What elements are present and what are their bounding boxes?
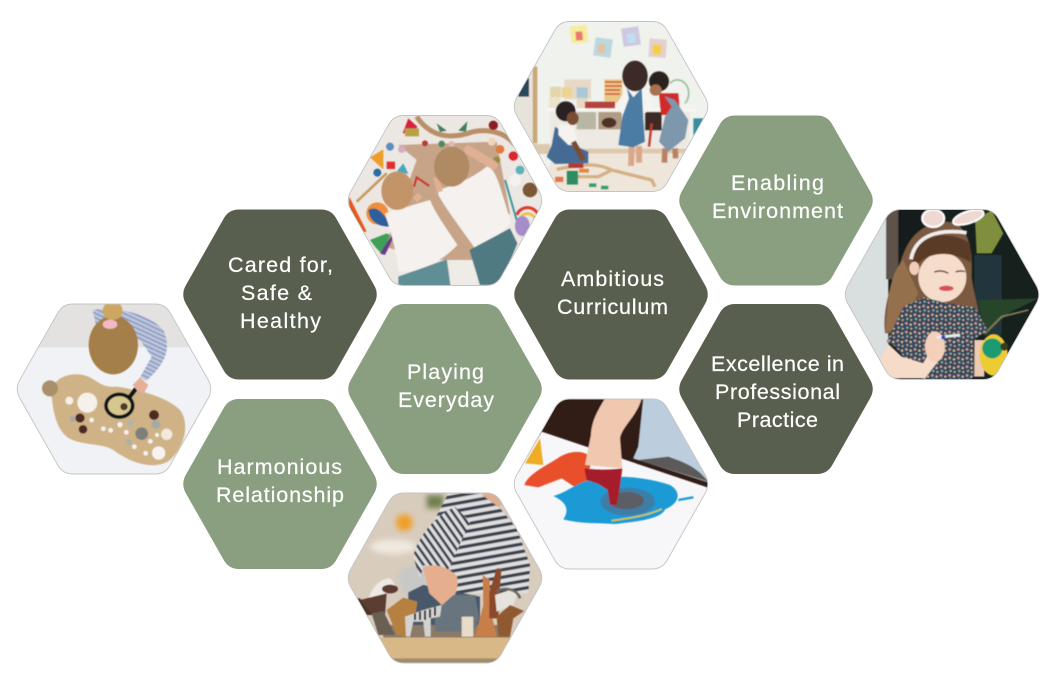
- hexagon: Harmonious Relationship: [183, 399, 377, 569]
- label: Enabling Environment: [712, 171, 843, 223]
- label: Ambitious Curriculum: Curriculum: [557, 295, 668, 319]
- photo border: finger painting: [514, 399, 708, 569]
- label: Playing Everyday: Everyday: [398, 388, 494, 412]
- label: Ambitious Curriculum: [557, 267, 668, 319]
- photo border: egg painting: [845, 210, 1039, 380]
- label: Playing Everyday: [398, 360, 494, 412]
- label: Cared for, Safe & Healthy: Safe &: [241, 281, 312, 305]
- photo hexagon: children playing in classroom: [514, 22, 708, 191]
- hexagon: Excellence in Professional Practice: [679, 304, 873, 474]
- photo border: classroom: [514, 22, 708, 192]
- label: Excellence in Professional Practice: Practice: [737, 408, 818, 432]
- label: Cared for, Safe & Healthy: [228, 253, 333, 333]
- label: Excellence in Professional Practice: Professional: [715, 380, 840, 404]
- label: Excellence in Professional Practice: Excellence in: [711, 352, 844, 376]
- label: Ambitious Curriculum: Ambitious: [561, 267, 664, 291]
- photo hexagon: child playing with toy animals: [348, 494, 542, 662]
- label: Harmonious Relationship: [216, 455, 344, 507]
- label: Cared for, Safe & Healthy: Cared for,: [228, 253, 333, 277]
- photo hexagon: child exploring sand with magnifier: [18, 304, 210, 474]
- photo hexagon: two children drawing on paper: [348, 116, 542, 285]
- label: Excellence in Professional Practice: [711, 352, 844, 432]
- photo hexagon: finger painting: [523, 400, 708, 525]
- hexagon: Ambitious Curriculum: [514, 210, 708, 380]
- hexagon: Playing Everyday: [348, 304, 542, 474]
- label: Enabling Environment: Environment: [712, 199, 843, 223]
- label: Playing Everyday: Playing: [407, 360, 484, 384]
- photo border: sand: [17, 304, 211, 474]
- label: Harmonious Relationship: Harmonious: [217, 455, 342, 479]
- label: Enabling Environment: Enabling: [731, 171, 824, 195]
- hexagon: Enabling Environment: [679, 116, 873, 286]
- photo hexagon: girl with bunny ears painting an egg: [846, 210, 1038, 379]
- photo border: toy animals: [348, 493, 542, 663]
- label: Cared for, Safe & Healthy: Healthy: [240, 309, 321, 333]
- label: Harmonious Relationship: Relationship: [216, 483, 344, 507]
- photo border: drawing: [348, 116, 542, 286]
- hexagon: Cared for, Safe & Healthy: [183, 210, 377, 380]
